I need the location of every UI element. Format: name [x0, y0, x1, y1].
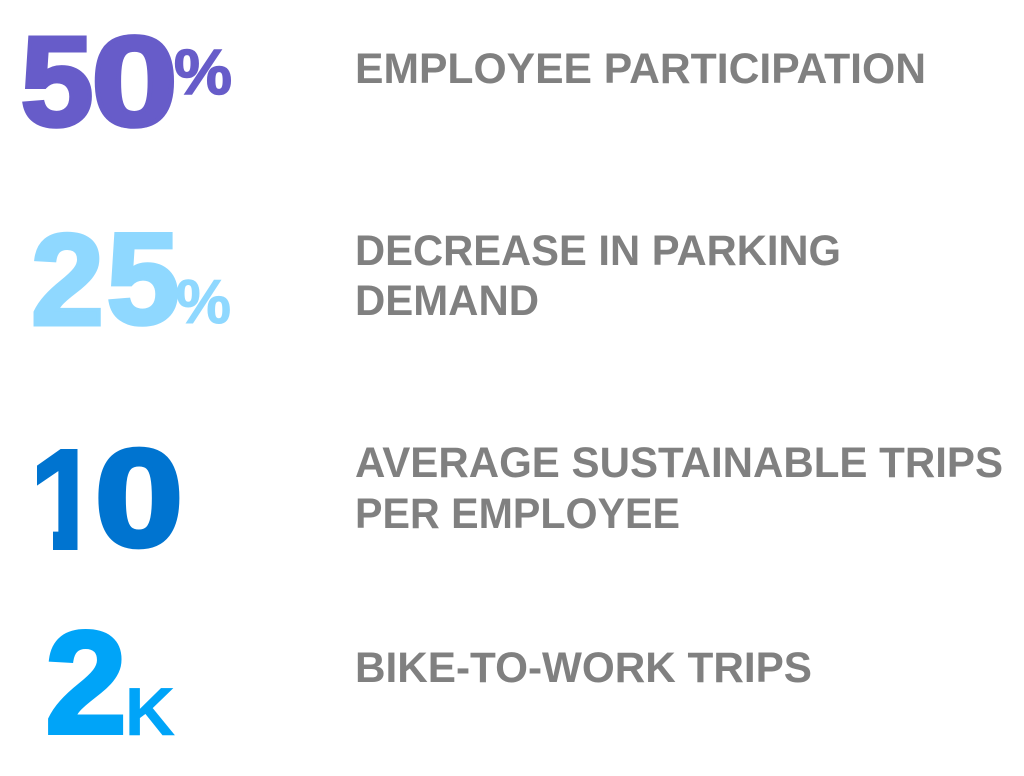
- number: 25%: [31, 206, 231, 352]
- label: average sustainable trips per employee: [355, 439, 1003, 538]
- label: average sustainable trips per employee: PER EMPLOYEE: [355, 490, 680, 538]
- number: 50%: 0: [91, 10, 178, 154]
- stat: 2K bike-to-work trips: [45, 601, 812, 764]
- label: decrease in parking demand: DECREASE IN PARKING: [355, 227, 841, 275]
- number: 25%: %: [176, 268, 231, 337]
- number: 10: 0: [95, 422, 183, 576]
- number: 50%: 5: [20, 10, 94, 154]
- stat: 10 average sustainable trips per employee: [37, 446, 1002, 550]
- number: 2K: [45, 601, 175, 764]
- number: 2K: 2: [45, 601, 127, 764]
- number: 10: [37, 446, 180, 550]
- label: average sustainable trips per employee: AVERAGE SUSTAINABLE TRIPS: [355, 439, 1003, 487]
- number: 25%: 2: [31, 206, 104, 352]
- stat: 25% decrease in parking demand: [31, 206, 841, 352]
- number: 50%: %: [174, 36, 232, 108]
- number: 50%: [20, 10, 232, 154]
- stat: 50% employee participation: [20, 10, 926, 154]
- number: 10: 1: [30, 420, 102, 578]
- number: 25%: 5: [106, 206, 180, 352]
- number: 2K: K: [125, 674, 175, 750]
- label: decrease in parking demand: [355, 227, 841, 325]
- label: decrease in parking demand: DEMAND: [355, 277, 539, 325]
- label: employee participation: EMPLOYEE PARTICIPATION: [355, 45, 926, 93]
- label: bike-to-work trips: BIKE-TO-WORK TRIPS: [355, 644, 812, 692]
